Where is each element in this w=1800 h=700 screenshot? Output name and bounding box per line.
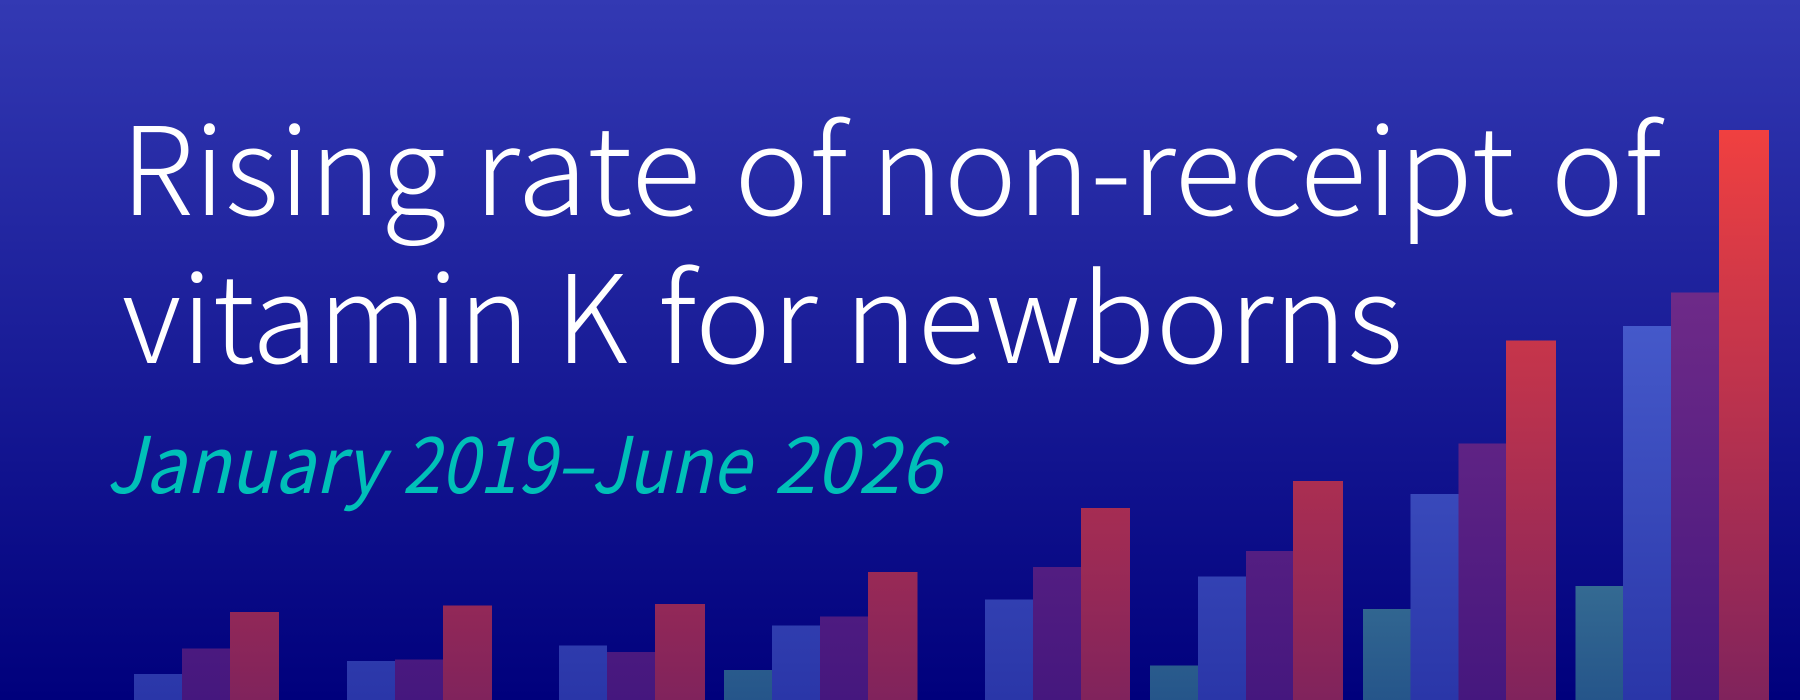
title line 2: newborns xyxy=(844,222,1403,399)
title line 1 xyxy=(121,74,1665,251)
subtitle: date range: 2026 xyxy=(774,404,950,516)
title xyxy=(121,74,1665,399)
bar chart xyxy=(134,130,1769,700)
title line 1: Rising xyxy=(121,74,446,251)
bar group 8 xyxy=(1576,130,1769,700)
subtitle: date range: 2019–June xyxy=(402,404,755,516)
title line 1: rate xyxy=(473,74,701,251)
title line 2 xyxy=(122,222,1403,399)
bar group 7 xyxy=(1363,340,1556,700)
title line 2: K xyxy=(556,222,628,399)
title line 1: of xyxy=(734,74,851,251)
title line 2: vitamin xyxy=(122,222,530,399)
bar group 2 xyxy=(347,606,492,700)
title line 1: of xyxy=(1550,74,1665,251)
bar group 4 xyxy=(724,572,918,700)
bar group 1 xyxy=(134,612,279,700)
title line 1: non-receipt xyxy=(870,74,1514,251)
bar group 3 xyxy=(559,604,705,700)
subtitle: date range xyxy=(106,404,950,516)
bar group 6 xyxy=(1150,481,1343,700)
subtitle: date range: January xyxy=(106,404,393,516)
bar group 5 xyxy=(985,508,1130,700)
title line 2: for xyxy=(658,222,819,399)
